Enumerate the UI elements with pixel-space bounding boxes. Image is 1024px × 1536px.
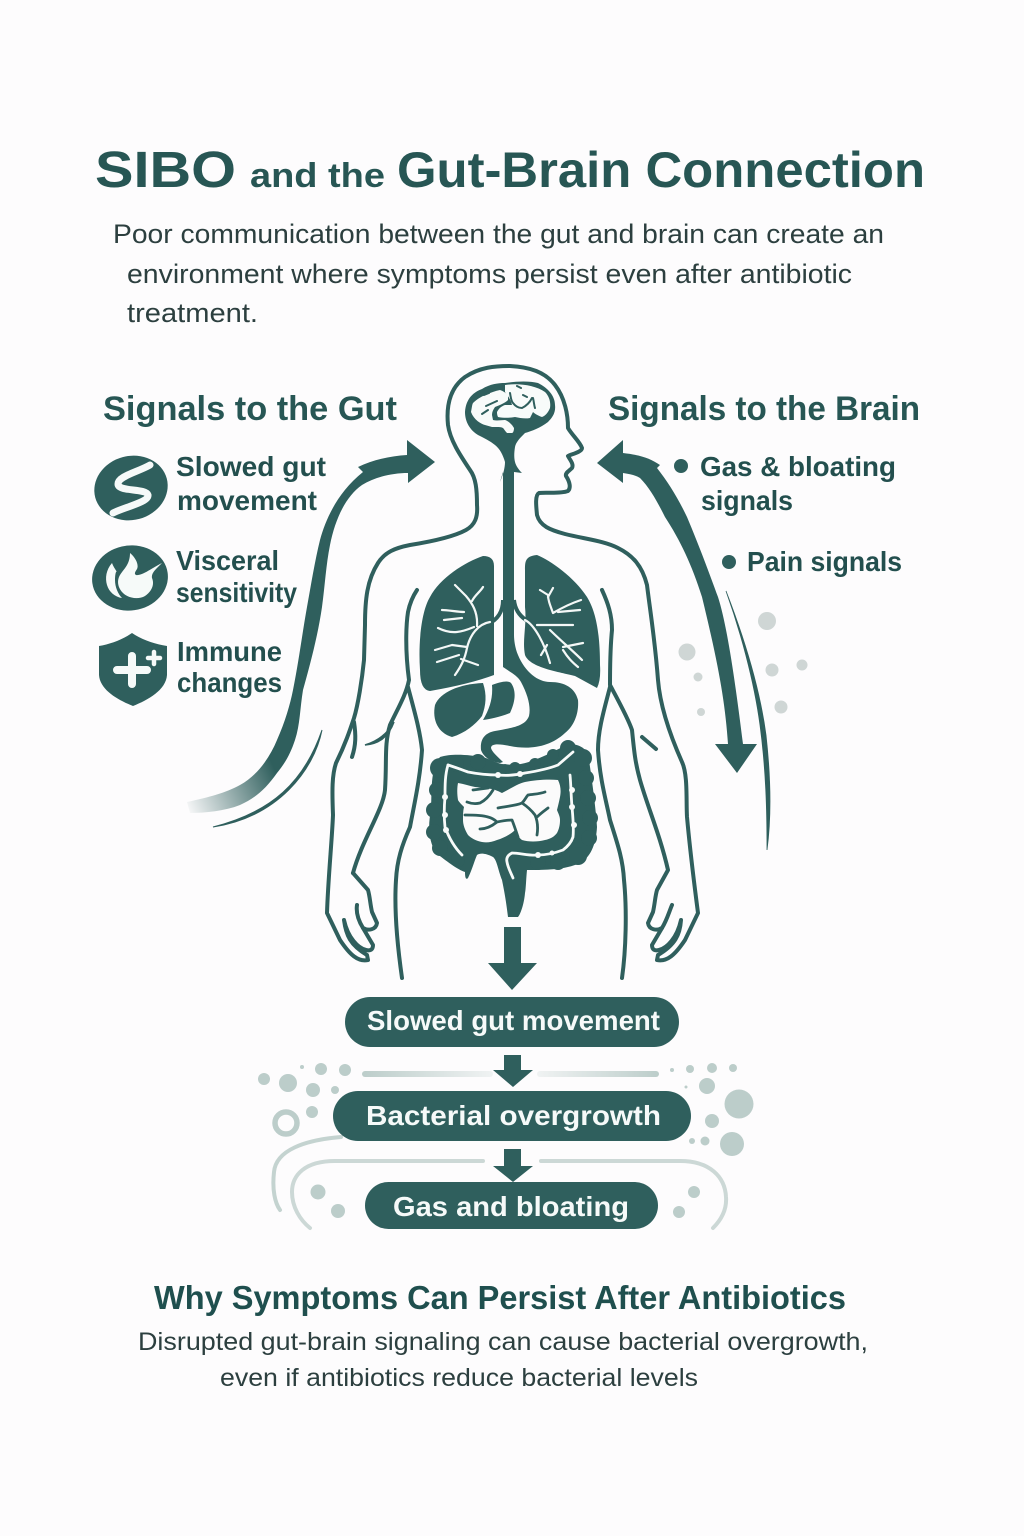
panel: signals to the gut	[87, 390, 397, 706]
step: gas and bloating	[365, 1182, 658, 1229]
bullet: pain signals	[722, 555, 736, 569]
arrow: step two to three	[493, 1149, 533, 1182]
closing text	[138, 1328, 868, 1392]
icon: visceral sensitivity	[88, 541, 172, 615]
heading: why symptoms can persist: Why Symptoms Can Persist After Antibiotics	[154, 1279, 846, 1316]
intro text: Poor communication between the gut and brain can create an	[113, 219, 884, 249]
icon: immune shield	[99, 633, 167, 706]
bronchi	[488, 600, 526, 624]
background dots and swooshes	[258, 1063, 754, 1228]
label: gas and bloating signals	[700, 451, 896, 516]
label: slowed gut movement: movement	[177, 485, 317, 516]
label: immune changes: Immune	[177, 636, 282, 667]
colon highlights	[444, 752, 573, 878]
intro text: treatment.	[127, 298, 258, 328]
step: gas and bloating: Gas and bloating	[393, 1191, 629, 1222]
icon: slowed gut movement	[87, 448, 175, 528]
label: gas and bloating signals: signals	[701, 485, 793, 516]
closing text: Disrupted gut-brain signaling can cause bacterial overgrowth,	[138, 1328, 868, 1356]
label: gas and bloating signals: Gas & bloating	[700, 451, 896, 482]
step: bacterial overgrowth	[333, 1091, 691, 1141]
title	[95, 141, 925, 198]
heading: signals to the gut: Signals to the Gut	[103, 390, 397, 428]
intro text: environment where symptoms persist even after antibiotic	[127, 259, 852, 289]
label: immune changes	[177, 636, 282, 698]
lungs	[419, 555, 600, 691]
airway branches	[435, 585, 583, 675]
arrow: curved arrow toward the head and the gut	[597, 440, 770, 850]
stomach	[481, 635, 578, 763]
label: slowed gut movement	[176, 451, 326, 516]
small intestine loops	[457, 780, 561, 842]
label: visceral sensitivity: sensitivity	[176, 577, 297, 608]
label: slowed gut movement: Slowed gut	[176, 451, 326, 482]
brain and spinal cord	[465, 382, 555, 640]
step: slowed gut movement	[345, 997, 679, 1047]
title: SIBO	[95, 141, 236, 198]
gas dots by the arrow	[678, 612, 808, 716]
intestine fold lines	[465, 788, 548, 837]
step: slowed gut movement: Slowed gut movement	[367, 1005, 660, 1036]
arrow: curved arrow to the brain from the gut side	[187, 440, 435, 827]
heading: signals to the brain: Signals to the Brain	[608, 390, 920, 428]
panel: signals to the brain	[608, 390, 920, 577]
intro text	[113, 219, 884, 328]
colon scallops	[426, 740, 598, 870]
colon highlight beads	[442, 771, 577, 858]
body figure outline	[327, 366, 698, 978]
closing text: even if antibiotics reduce bacterial levels	[220, 1364, 698, 1392]
bullet: gas and bloating	[674, 459, 688, 473]
title: Gut-Brain Connection	[397, 142, 925, 198]
intestines	[426, 740, 598, 917]
liver	[434, 682, 515, 737]
label: visceral sensitivity: Visceral	[176, 545, 279, 576]
brain folds	[471, 384, 550, 433]
title: and the	[250, 157, 385, 195]
label: immune changes: changes	[177, 667, 282, 698]
step: bacterial overgrowth: Bacterial overgrowth	[366, 1100, 661, 1131]
arrow: body down to flow	[488, 927, 537, 990]
panel: flow chart	[258, 997, 754, 1229]
label: pain signals: Pain signals	[747, 546, 902, 577]
label: visceral sensitivity	[176, 545, 297, 608]
arrow: step one to two	[493, 1055, 533, 1087]
